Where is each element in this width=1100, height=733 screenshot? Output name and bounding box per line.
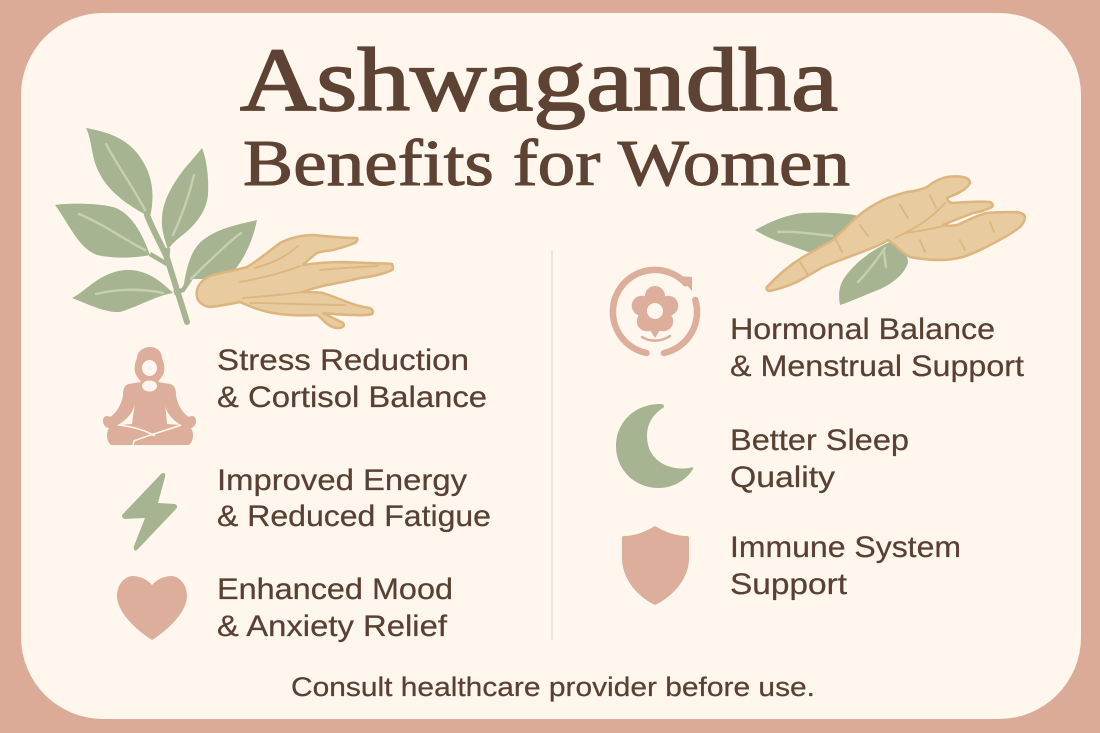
icon: meditating figure [103,347,196,445]
benefit: hormonal balance: & Menstrual Support [730,350,1025,383]
benefit: hormonal balance [613,270,1025,383]
benefit: energy: Improved Energy [217,464,467,497]
icon: heart [117,576,187,640]
benefit: sleep: Quality [730,461,835,494]
benefit: mood: & Anxiety Relief [217,610,448,643]
icon: lightning bolt [122,473,177,550]
benefit: stress reduction [103,344,487,445]
benefit: stress reduction: Stress Reduction [217,344,469,377]
icon: crescent moon [616,404,693,488]
title [240,31,850,200]
benefit: sleep [616,404,909,494]
icon: shield [622,526,689,605]
illustration: root with leaves [755,176,1025,305]
title: Ashwagandha [240,31,838,130]
benefit: energy: & Reduced Fatigue [217,500,491,533]
benefit: mood [117,573,453,643]
benefit: mood: Enhanced Mood [217,573,453,606]
benefit: immune: Immune System [730,531,961,564]
benefit: sleep: Better Sleep [730,424,909,457]
icon: flower in cycle ring [613,270,697,353]
benefit: immune: Support [730,568,848,601]
illustration: ashwagandha sprig and root [55,128,393,328]
benefit: immune [622,526,961,605]
title: Benefits for Women [243,127,850,200]
benefit: stress reduction: & Cortisol Balance [217,381,487,414]
benefit: energy [122,464,491,550]
vertical divider [551,250,553,640]
footer note: Consult healthcare provider before use. [291,672,815,702]
benefit: hormonal balance: Hormonal Balance [730,313,995,346]
